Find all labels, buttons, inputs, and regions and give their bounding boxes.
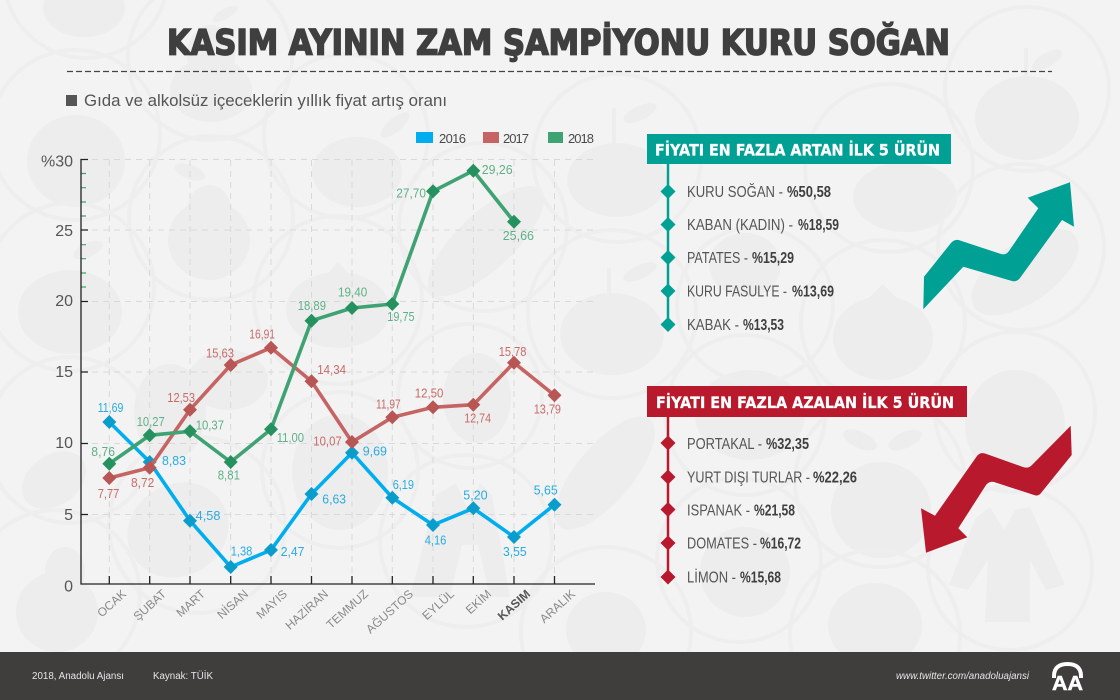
x axis month labels: HAZİRAN bbox=[282, 587, 331, 632]
value labels 2018: 18,89 bbox=[298, 299, 326, 313]
y axis labels: 15 bbox=[55, 364, 73, 381]
legend: 2018 bbox=[568, 131, 594, 146]
list: fallers: DOMATES - bbox=[687, 536, 757, 552]
icon: Anadolu Ajansı logo bbox=[1052, 664, 1083, 695]
icon: falling arrow bbox=[921, 426, 1072, 553]
value labels 2017 bbox=[98, 328, 561, 501]
x axis month labels: AĞUSTOS bbox=[363, 586, 416, 636]
y axis labels bbox=[41, 154, 73, 596]
value labels 2017: 11,97 bbox=[376, 397, 401, 411]
value labels 2016: 9,69 bbox=[363, 444, 387, 458]
x axis month labels bbox=[94, 586, 578, 636]
value labels 2017: 13,79 bbox=[534, 402, 561, 416]
footer: Kaynak: TÜİK bbox=[153, 669, 213, 682]
icon: Anadolu Ajansı logo: AA bbox=[1052, 673, 1083, 695]
value labels 2017: 7,77 bbox=[98, 487, 119, 501]
y axis labels: 10 bbox=[55, 435, 73, 452]
heading: risers: FİYATI EN FAZLA ARTAN İLK 5 ÜRÜN bbox=[655, 140, 940, 160]
title: KASIM AYININ ZAM ŞAMPİYONU KURU SOĞAN bbox=[167, 22, 950, 64]
x axis month labels: NİSAN bbox=[214, 587, 251, 622]
x axis month labels: OCAK bbox=[94, 587, 129, 620]
list: fallers: PORTAKAL - bbox=[687, 436, 762, 453]
legend: 2017 bbox=[503, 131, 529, 146]
legend: 2016 bbox=[439, 131, 466, 146]
y axis labels: 5 bbox=[64, 507, 73, 524]
x axis month labels: ŞUBAT bbox=[131, 586, 169, 623]
list: risers: %18,59 bbox=[798, 217, 839, 234]
subtitle: Gıda ve alkolsüz içeceklerin yıllık fiyat artış oranı bbox=[84, 92, 447, 110]
list: fallers: %21,58 bbox=[754, 502, 795, 520]
list: fallers: %22,26 bbox=[813, 470, 857, 486]
list: risers: PATATES - bbox=[687, 250, 748, 267]
value labels 2016: 5,65 bbox=[534, 483, 558, 497]
list: risers: %50,58 bbox=[787, 184, 831, 201]
list: fallers: LİMON - bbox=[687, 568, 736, 586]
x axis month labels: MAYIS bbox=[254, 587, 290, 622]
value labels 2017: 10,07 bbox=[313, 435, 342, 449]
list: fallers: YURT DIŞI TURLAR - bbox=[687, 470, 810, 486]
value labels 2018: 19,75 bbox=[387, 310, 415, 324]
value labels 2017: 12,53 bbox=[167, 391, 195, 405]
series 2018 bbox=[102, 164, 521, 471]
heading: risers bbox=[647, 134, 951, 164]
value labels 2018: 10,37 bbox=[196, 418, 224, 432]
value labels 2018: 10,27 bbox=[137, 415, 165, 429]
series 2016 bbox=[102, 415, 562, 574]
value labels 2018: 29,26 bbox=[482, 163, 513, 177]
icon: rising arrow bbox=[923, 182, 1074, 309]
list: fallers: %32,35 bbox=[766, 436, 809, 453]
list: risers: %13,69 bbox=[792, 284, 834, 300]
list: risers: KABAK - bbox=[687, 317, 739, 334]
list: risers: KURU SOĞAN - bbox=[687, 184, 783, 201]
value labels 2018: 27,70 bbox=[396, 186, 426, 200]
x axis month labels: MART bbox=[174, 586, 209, 620]
list: fallers bbox=[660, 436, 857, 586]
legend bbox=[416, 131, 594, 146]
footer bbox=[0, 652, 1120, 700]
value labels 2018: 8,76 bbox=[91, 445, 115, 459]
list: fallers: %16,72 bbox=[760, 536, 801, 552]
list: risers: %13,53 bbox=[743, 317, 784, 334]
y axis labels: 20 bbox=[55, 293, 73, 310]
series 2017 bbox=[102, 341, 562, 485]
value labels 2016 bbox=[98, 401, 558, 559]
footer: www.twitter.com/anadoluajansi bbox=[896, 671, 1030, 682]
value labels 2016: 1,38 bbox=[231, 544, 252, 558]
value labels 2016: 11,69 bbox=[98, 401, 123, 415]
list: risers: %15,29 bbox=[752, 250, 794, 267]
value labels 2018: 25,66 bbox=[503, 229, 534, 243]
value labels 2016: 6,19 bbox=[393, 478, 414, 492]
value labels 2017: 15,78 bbox=[499, 345, 526, 359]
list: fallers: %15,68 bbox=[740, 570, 781, 586]
value labels 2018: 8,81 bbox=[218, 469, 240, 483]
y axis labels: 25 bbox=[55, 223, 73, 240]
value labels 2017: 16,91 bbox=[249, 328, 275, 342]
value labels 2017: 15,63 bbox=[206, 346, 234, 360]
value labels 2016: 8,83 bbox=[162, 454, 186, 468]
x axis month labels: TEMMUZ bbox=[323, 587, 371, 632]
value labels 2017: 12,74 bbox=[464, 412, 491, 426]
list: fallers: ISPANAK - bbox=[687, 502, 750, 520]
value labels 2016: 2,47 bbox=[281, 545, 304, 559]
value labels 2018: 19,40 bbox=[338, 286, 367, 300]
y axis labels: 0 bbox=[64, 578, 73, 596]
x axis month labels: EKİM bbox=[463, 587, 494, 617]
footer: 2018, Anadolu Ajansı bbox=[32, 671, 124, 682]
list: risers: KABAN (KADIN) - bbox=[687, 217, 793, 234]
heading: fallers bbox=[647, 386, 967, 417]
list: risers bbox=[660, 184, 839, 334]
value labels 2017: 14,34 bbox=[317, 363, 346, 377]
panel: top 5 fallers bbox=[647, 386, 967, 586]
value labels 2018 bbox=[91, 163, 534, 483]
value labels 2017: 8,72 bbox=[131, 476, 154, 490]
value labels 2016: 4,16 bbox=[425, 534, 446, 548]
y axis labels: %30 bbox=[41, 154, 73, 170]
panel: top 5 risers bbox=[647, 134, 951, 334]
value labels 2016: 4,58 bbox=[196, 509, 220, 523]
heading: fallers: FİYATI EN FAZLA AZALAN İLK 5 ÜRÜN bbox=[656, 393, 954, 412]
value labels 2017: 12,50 bbox=[415, 386, 443, 400]
x axis month labels: EYLÜL bbox=[419, 587, 457, 623]
value labels 2016: 6,63 bbox=[322, 492, 346, 506]
list: risers: KURU FASULYE - bbox=[687, 284, 787, 300]
value labels 2016: 3,55 bbox=[503, 545, 527, 559]
value labels 2018: 11,00 bbox=[277, 431, 304, 445]
line chart bbox=[41, 154, 595, 636]
x axis month labels: KASIM bbox=[495, 587, 533, 623]
value labels 2016: 5,20 bbox=[463, 488, 488, 502]
x axis month labels: ARALIK bbox=[537, 587, 578, 626]
